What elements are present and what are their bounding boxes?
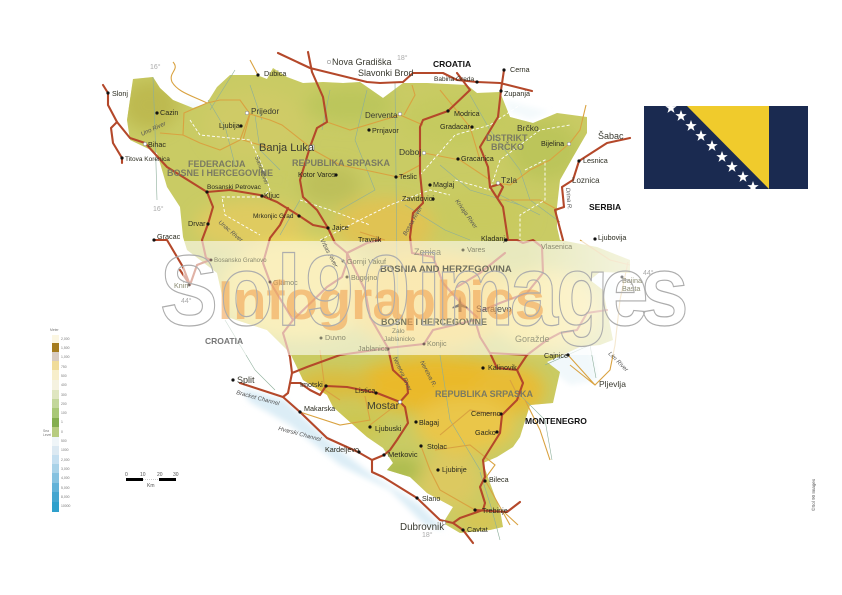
city names: Ljubinje — [442, 465, 467, 474]
legend values: 1,500 — [61, 346, 70, 350]
legend values: 0 — [61, 430, 63, 434]
faded large city names: Zenica — [414, 247, 441, 257]
legend values: 8,000 — [61, 495, 70, 499]
legend values: 300 — [61, 393, 67, 397]
adriatic coastal water — [180, 100, 625, 530]
legend colour bar — [52, 335, 59, 512]
region labels: REPUBLIKA SRPASKA — [435, 389, 534, 399]
degree labels — [150, 54, 654, 539]
city names: Zavidovici — [402, 194, 434, 203]
city names: Ljubuski — [375, 424, 402, 433]
river and channel labels: Bosna River — [403, 205, 425, 237]
scale bar: 30 — [173, 472, 179, 478]
city names: Gracac — [157, 232, 181, 241]
city names: Trebinje — [482, 506, 508, 515]
large city names: Derventa — [365, 111, 398, 120]
river and channel labels: Sana River — [253, 156, 269, 187]
legend values: 750 — [61, 365, 67, 369]
region labels: REPUBLIKA SRPASKA — [292, 158, 391, 168]
faded city names: Gornji Vakuf — [347, 257, 386, 266]
large city names: Šabac — [598, 131, 624, 141]
river and channel labels: Lim River — [607, 351, 629, 374]
legend values: 4,000 — [61, 476, 70, 480]
region labels: BRČKO — [491, 141, 524, 152]
city names: Travnik — [358, 235, 382, 244]
city names: Cazin — [160, 108, 178, 117]
faded large city names: Goražde — [515, 334, 550, 344]
region labels: FEDERACIJA — [188, 159, 246, 169]
legend values: Level — [43, 433, 51, 437]
city names: Dubica — [264, 69, 286, 78]
region labels: BOSNE I HERCEGOVINE — [381, 317, 487, 327]
faded large city names — [414, 247, 550, 344]
city names: Babina Greda — [434, 76, 474, 83]
degree labels: 16° — [153, 205, 164, 213]
faded city names: Jablanicko — [384, 336, 415, 343]
faded city names: Knin — [174, 281, 188, 290]
degree labels: 16° — [150, 63, 161, 71]
legend values — [43, 337, 71, 508]
river and channel labels: Krivaja River — [453, 199, 478, 231]
faded city names: Vares — [467, 245, 486, 254]
motorways and main roads — [103, 52, 630, 543]
city names: Bosanski Petrovac — [207, 184, 262, 191]
faded city names: Glamoc — [273, 278, 298, 287]
scale bar — [125, 472, 179, 489]
legend values: 500 — [61, 439, 67, 443]
image credit: ©Sol 90 Images — [810, 478, 816, 511]
city names: Prnjavor — [372, 126, 399, 135]
city names: Cemerno — [471, 409, 501, 418]
city names: Bileca — [489, 475, 509, 484]
city names: Kljuc — [264, 191, 280, 200]
legend values: 10000 — [61, 504, 71, 508]
legend values: 2,000 — [61, 337, 70, 341]
faded city names: Bugojno — [351, 273, 377, 282]
river and channel labels: Vrbas River — [318, 238, 339, 269]
river and channel labels: Neretva R. — [418, 360, 437, 388]
faded city names: Zalo — [392, 328, 405, 335]
scale bar: 0 — [125, 472, 128, 478]
elevation legend — [43, 328, 71, 512]
faded city names — [174, 242, 642, 353]
city names: Modrica — [454, 109, 480, 118]
large city names: Tzla — [501, 175, 517, 185]
large city names: Doboj — [399, 147, 421, 157]
large city names: Mostar — [367, 400, 400, 412]
city names: Ljubija — [219, 121, 240, 130]
legend values: Sea — [43, 429, 49, 433]
region labels — [167, 133, 534, 399]
white dashed boundaries — [190, 105, 570, 240]
large city names: Slavonki Brod — [358, 68, 414, 78]
city names: Kalinovik — [488, 363, 517, 372]
region labels: DISTRIKT — [486, 133, 528, 143]
terrain map of Bosnia and Herzegovina — [127, 68, 630, 533]
legend values: 1 — [61, 420, 63, 424]
country labels: CROATIA — [433, 59, 471, 69]
city names: Teslic — [399, 172, 417, 181]
city names: Gradacar — [440, 122, 471, 131]
faded city names: Jablanica — [358, 344, 388, 353]
region labels: BOSNE I HERCEGOVINE — [167, 168, 273, 178]
city names: Jajce — [332, 223, 349, 232]
city names: Kardeljevo — [325, 445, 359, 454]
city names: Kotor Varos — [298, 170, 336, 179]
large city names: Nova Gradiška — [332, 57, 392, 67]
faded city names: Duvno — [325, 333, 346, 342]
degree labels: 18° — [397, 54, 408, 62]
degree labels: 44° — [643, 269, 654, 277]
faded city names: Konjic — [427, 339, 447, 348]
city names: Lesnica — [583, 156, 608, 165]
country labels — [205, 59, 621, 426]
elevation legend: Meter — [50, 328, 60, 332]
city names: Makarska — [304, 404, 335, 413]
large city names: Split — [237, 375, 255, 385]
city names: Cavtat — [467, 525, 488, 534]
large city names — [237, 57, 626, 533]
legend values: 400 — [61, 383, 67, 387]
city names: Gracanica — [461, 154, 494, 163]
scale bar: Km — [147, 483, 154, 489]
region labels: BOSNIA AND HERZEGOVINA — [380, 264, 512, 275]
large city names: Loznica — [572, 176, 600, 185]
country labels: CROATIA — [205, 336, 243, 346]
city dots — [106, 68, 623, 532]
city names: Cajnice — [544, 351, 568, 360]
scale bar: 20 — [157, 472, 163, 478]
city names: Stolac — [427, 442, 447, 451]
city names: Zupanja — [504, 89, 530, 98]
airport icon — [452, 296, 468, 312]
city names: Metkovic — [388, 450, 418, 459]
watermark white band — [183, 241, 640, 355]
watermark: Infographics: Infographics — [218, 269, 545, 331]
legend values: 1000 — [61, 448, 69, 452]
faded city names: Vlasenica — [541, 242, 572, 251]
rivers — [153, 60, 630, 540]
scale bar: 10 — [140, 472, 146, 478]
city names: Imotski — [300, 380, 323, 389]
river and channel labels: Unac River — [217, 220, 244, 244]
river and channel labels: Bracket Channel — [235, 390, 281, 408]
city names: Maglaj — [433, 180, 455, 189]
legend values: 2,000 — [61, 458, 70, 462]
flag of Bosnia and Herzegovina — [644, 102, 808, 192]
faded large city names: Sarajevo — [476, 304, 512, 314]
large city names: Prijedor — [251, 107, 279, 116]
city names: Drvar — [188, 219, 206, 228]
city names: Mrkonjic Grad — [253, 213, 294, 220]
country labels: SERBIA — [589, 202, 621, 212]
river and channel labels: Uno River — [140, 121, 168, 138]
city names: Slonj — [112, 89, 128, 98]
legend values: 200 — [61, 402, 67, 406]
city names: Kladanj — [481, 234, 505, 243]
river and channel labels — [140, 121, 629, 443]
city names: Cerna — [510, 65, 530, 74]
watermark: Sol90images: Sol90images — [160, 234, 689, 346]
city names: Bijelina — [541, 139, 564, 148]
degree labels: 18° — [422, 531, 433, 539]
white city markers — [143, 60, 571, 525]
large city names: Pljevlja — [599, 379, 626, 389]
city names: Listica — [355, 386, 375, 395]
city names: Ljubovija — [598, 233, 626, 242]
city names — [112, 65, 626, 534]
faded city names: Basta — [622, 284, 640, 293]
degree labels: 44° — [181, 297, 192, 305]
large city names: Brčko — [517, 123, 539, 133]
legend values: 100 — [61, 411, 67, 415]
legend values: 5,000 — [61, 486, 70, 490]
large city names: Dubrovnik — [400, 522, 444, 533]
large city names: Banja Luka — [259, 142, 315, 154]
city names: Blagaj — [419, 418, 439, 427]
faded city names: Bosansko Grahovo — [214, 257, 267, 264]
city names: Gacko — [475, 428, 496, 437]
faded city names: Bajina — [622, 276, 642, 285]
city names: Slano — [422, 494, 440, 503]
legend values: 3,000 — [61, 467, 70, 471]
cities — [106, 57, 642, 534]
legend values: 500 — [61, 374, 67, 378]
river and channel labels: Hvarski Channel — [277, 426, 322, 443]
legend values: 1,000 — [61, 355, 70, 359]
city names: Bihac — [148, 140, 166, 149]
river and channel labels: Drina R. — [564, 188, 572, 210]
country labels: MONTENEGRO — [525, 416, 587, 426]
river and channel labels: Neretva River — [391, 356, 413, 393]
city names: Titova Korenica — [125, 156, 170, 163]
